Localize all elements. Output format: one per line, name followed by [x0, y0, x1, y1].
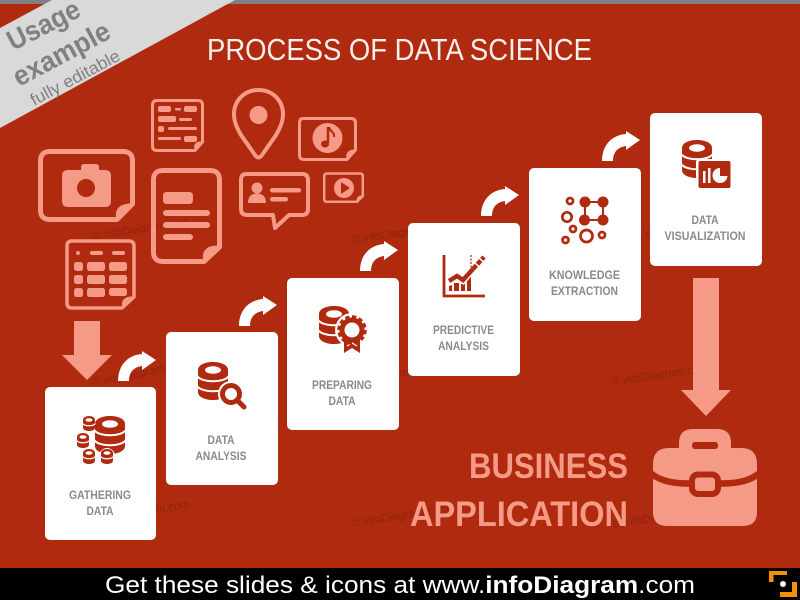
icon: knowledge network	[562, 196, 608, 243]
icon: table note	[67, 241, 136, 309]
panel: gathering data: DATA	[86, 504, 114, 518]
panel: preparing data: PREPARING	[312, 378, 372, 392]
watermarks: © infoDiagram.com	[91, 358, 190, 389]
icon: briefcase	[647, 429, 763, 526]
icon: video document	[324, 174, 364, 203]
footer bar	[0, 568, 800, 600]
panel: gathering data	[45, 387, 156, 540]
panel: data analysis	[166, 332, 278, 485]
panel: knowledge extraction: KNOWLEDGE	[549, 268, 620, 282]
panel: gathering data: GATHERING	[69, 488, 131, 502]
watermarks: © infoDiagram.com	[351, 503, 450, 530]
icon: large document	[154, 170, 221, 263]
panel: data visualization	[650, 113, 762, 266]
icon: contact speech bubble	[241, 174, 308, 228]
heading: business application: BUSINESS	[469, 447, 628, 486]
panel: data analysis: ANALYSIS	[196, 449, 247, 463]
heading: business application: APPLICATION	[410, 495, 628, 534]
arrow: icons to gathering data	[62, 321, 112, 380]
arrow: step 2 to 3	[239, 296, 277, 326]
arrow: step 4 to 5	[481, 186, 519, 216]
arrow: step 3 to 4	[360, 241, 398, 271]
icon: predictive chart	[444, 255, 485, 296]
icon: database with award badge	[318, 306, 369, 353]
heading: business application	[410, 447, 628, 534]
panel: knowledge extraction	[529, 168, 641, 321]
watermarks: © infoDiagram.com	[92, 499, 191, 526]
corner banner: usage example	[0, 0, 235, 128]
icon: database with magnifier	[197, 362, 244, 407]
panel: predictive analysis: ANALYSIS	[438, 339, 489, 353]
icon: location pin	[234, 90, 283, 158]
panel: knowledge extraction: EXTRACTION	[551, 284, 618, 298]
panel: data visualization: VISUALIZATION	[664, 229, 746, 243]
watermarks: © infoDiagram.com	[351, 220, 450, 247]
panel: data visualization: DATA	[692, 213, 719, 227]
icon: database with charts	[681, 140, 732, 190]
title: PROCESS OF DATA SCIENCE	[207, 32, 592, 67]
corner banner: usage example: example	[7, 15, 115, 92]
arrow: to business application	[681, 278, 731, 416]
icon: camera document	[40, 152, 135, 221]
icon: multiple databases	[76, 416, 126, 464]
watermarks	[91, 216, 711, 531]
panel: preparing data: DATA	[328, 394, 356, 408]
watermarks: © infoDiagram.com	[569, 226, 668, 253]
icon: text note	[152, 100, 204, 151]
panel: data analysis: DATA	[208, 433, 235, 447]
panel: predictive analysis: PREDICTIVE	[433, 323, 494, 337]
logo	[769, 571, 797, 597]
corner banner: usage example: fully editable	[27, 46, 123, 110]
watermarks: © infoDiagram.com	[612, 504, 711, 531]
watermarks: © infoDiagram.com	[92, 216, 191, 243]
watermarks: © infoDiagram.com	[611, 362, 710, 389]
icon: music note document	[300, 118, 357, 160]
watermarks: © infoDiagram.com	[311, 367, 410, 394]
arrow: step 5 to 6	[602, 131, 640, 161]
footer text: Get these slides & icons at www. infoDiagram .com	[105, 572, 695, 599]
top grey bar	[0, 0, 800, 4]
arrow: step 1 to 2	[118, 351, 156, 381]
panel: preparing data	[287, 278, 399, 430]
panel: predictive analysis	[408, 223, 520, 376]
